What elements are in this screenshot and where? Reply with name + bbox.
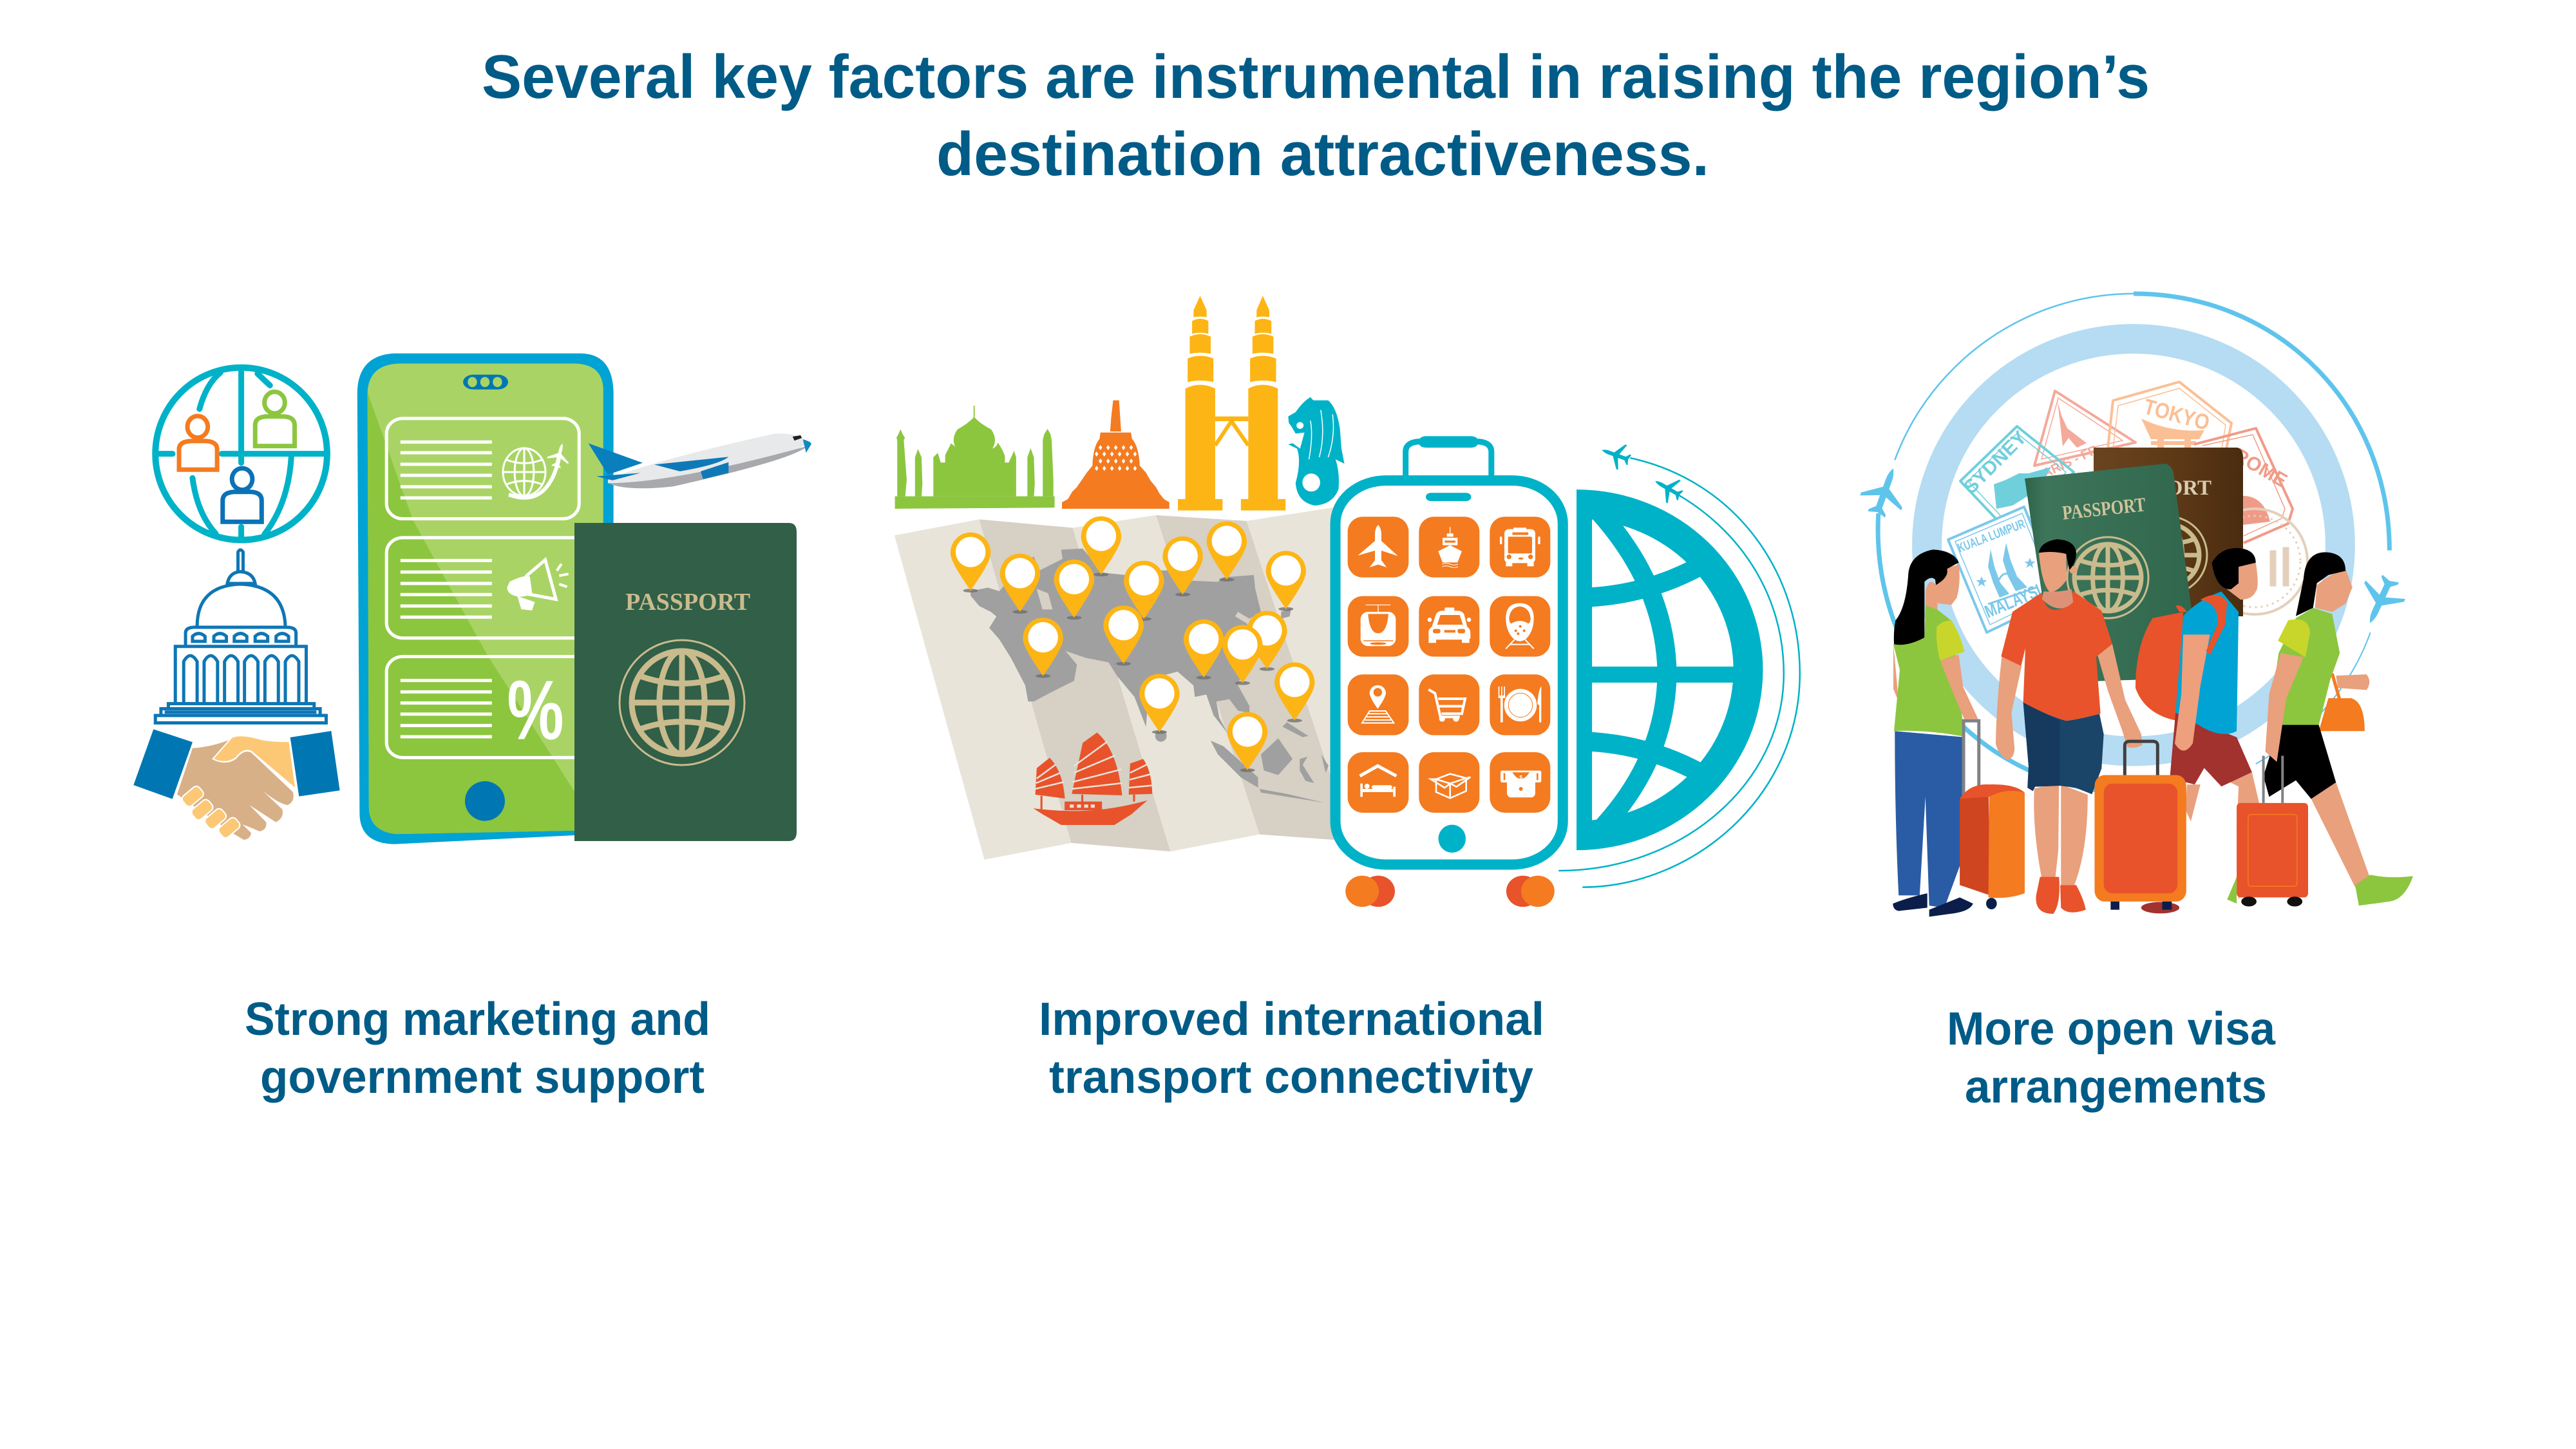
brown passport: PASSPORT [2103, 477, 2211, 500]
suitcase: small red right [2237, 755, 2308, 907]
suitcase: orange left [1960, 721, 2025, 909]
icon: train [1506, 603, 1534, 649]
caption: marketing [245, 994, 710, 1103]
icon: megaphone [508, 560, 569, 609]
title [482, 43, 2150, 189]
orbit lines [1558, 458, 1800, 887]
title: Several key factors are instrumental in raising the region’s [482, 43, 2150, 111]
person: woman walking [2227, 553, 2413, 905]
icon: shopping cart [1428, 690, 1465, 722]
location pins [951, 516, 1314, 772]
person: man with backpack [2136, 548, 2260, 900]
passport [574, 523, 797, 841]
caption: connectivity: transport connectivity [1049, 1052, 1533, 1103]
icon: globe with plane [503, 440, 573, 498]
icon: plane [1358, 525, 1398, 567]
folded map of Asia [895, 507, 1336, 860]
icon: small airplanes [1597, 438, 1687, 507]
landmark: Taj Mahal [895, 406, 1055, 509]
person: man with orange shirt [1996, 539, 2143, 914]
icon: ship [1438, 527, 1462, 567]
icon: bus [1500, 527, 1540, 566]
icon: taxi [1428, 607, 1471, 643]
circular rings [1878, 294, 2389, 793]
icon: government building [155, 550, 326, 723]
caption: visa: More open visa [1947, 1003, 2276, 1055]
stamp: Sydney [1960, 426, 2074, 541]
brown passport [2094, 448, 2243, 616]
stamp: Tokyo [2108, 382, 2231, 451]
percent sign: % [507, 663, 564, 757]
caption: connectivity [1039, 994, 1544, 1103]
icon: map pin [1362, 685, 1394, 723]
caption: marketing: Strong marketing and [245, 994, 710, 1045]
stamp: Paris [2034, 391, 2136, 484]
stamp: Kuala Lumpur: KUALA LUMPUR [1956, 517, 2027, 556]
icon: junk boat [1033, 732, 1152, 825]
caption: connectivity: Improved international [1039, 994, 1544, 1045]
stamp: Sydney: SYDNEY [1960, 427, 2031, 498]
passport: PASSPORT [625, 589, 750, 616]
icon: box [1431, 774, 1470, 798]
landmark: Borobudur stupa [1062, 401, 1170, 509]
stamp: Kuala Lumpur [1948, 507, 2061, 632]
stamp: Rome [2194, 428, 2293, 543]
transport and travel icon grid [1348, 516, 1550, 813]
title: destination attractiveness. [936, 120, 1709, 189]
green passport: PASSPORT [2061, 493, 2147, 524]
phone with marketing cards [357, 354, 614, 844]
globe half [1577, 489, 1763, 850]
caption: visa [1947, 1003, 2276, 1113]
stamp: Rome: ROME [2230, 444, 2291, 492]
stamp: Paris: PARIS - FR [2034, 442, 2101, 484]
stamp: Tokyo: TOKYO [2141, 395, 2212, 435]
icon: plate and cutlery [1499, 686, 1541, 723]
suitcase: large orange centre [2094, 741, 2186, 913]
landmark: Merlion [1288, 397, 1345, 506]
suitcase phone [1336, 436, 1563, 907]
caption: visa: arrangements [1965, 1061, 2267, 1113]
icon: handshake [133, 729, 340, 840]
panel: transport connectivity illustration [895, 296, 1800, 907]
icon: airplanes on ring [1856, 461, 2410, 632]
airplane [589, 433, 811, 488]
icon: tram [1361, 605, 1396, 646]
stamp: Kuala Lumpur: MALAYSIA [1982, 576, 2053, 622]
icon: cash machine [1501, 771, 1541, 797]
person: woman in green [1893, 549, 1978, 916]
landmark: Petronas Towers [1178, 296, 1285, 511]
icon: cash machine: $ [1519, 774, 1522, 781]
panel: marketing and government support illustration [133, 354, 811, 844]
stamp: Taj Mahal [2202, 509, 2307, 614]
green passport [2025, 464, 2201, 683]
icon: bed [1360, 766, 1396, 797]
caption: marketing: government support [260, 1052, 705, 1103]
panel: open visa arrangements illustration [1856, 294, 2413, 916]
icon: globe with people [155, 368, 327, 540]
